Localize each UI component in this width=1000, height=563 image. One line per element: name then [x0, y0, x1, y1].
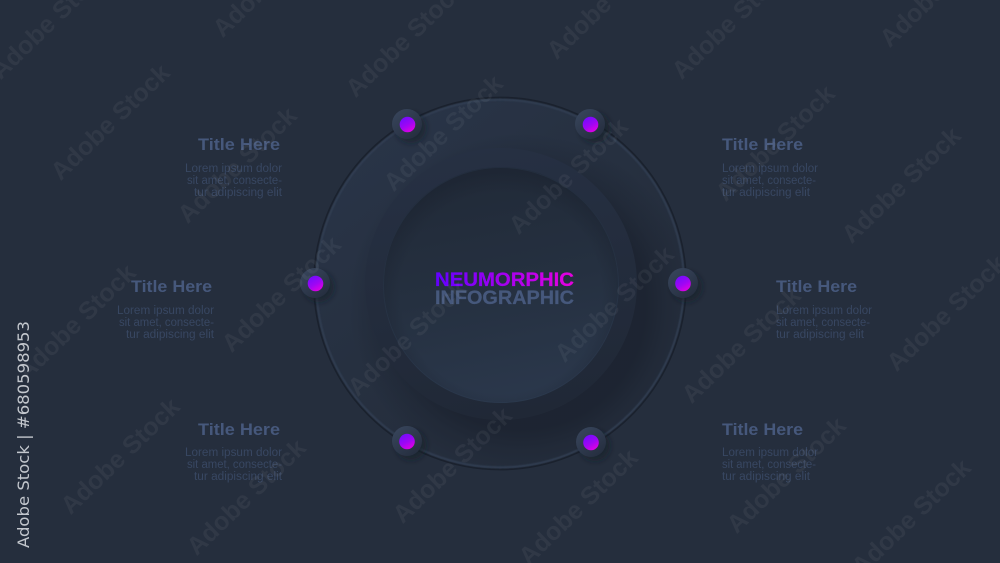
- circular diagram: [300, 98, 702, 470]
- text block: bottom left: Title Here: [198, 421, 280, 439]
- text block: top left: [185, 136, 283, 199]
- outer ring track: [314, 98, 686, 470]
- stock watermarks: Adobe Stock: [503, 113, 634, 240]
- knob: right: [668, 268, 702, 302]
- text block: bottom left: tur adipiscing elit: [194, 471, 283, 483]
- text block: top right: Title Here: [722, 136, 803, 154]
- stock watermarks: Adobe Stock: [710, 80, 841, 207]
- text block: bottom left: Lorem ipsum dolor: [185, 447, 282, 459]
- center title: INFOGRAPHIC: [435, 287, 574, 309]
- knob: bottom right: [576, 427, 610, 461]
- text block: middle right: [776, 278, 872, 341]
- stock id label: Adobe Stock | #680598953: [14, 321, 33, 548]
- text block: bottom right: Lorem ipsum dolor: [722, 447, 818, 459]
- stock watermarks: Adobe Stock: [387, 402, 518, 529]
- stock watermarks: Adobe Stock: [11, 259, 142, 386]
- stock watermarks: Adobe Stock: [836, 122, 967, 249]
- text block: bottom right: [722, 421, 818, 483]
- knob: bottom left: [392, 426, 426, 460]
- text block: top left: tur adipiscing elit: [194, 187, 283, 199]
- text block: top left: sit amet, consecte-: [187, 175, 282, 187]
- center title: [435, 269, 574, 309]
- text block: middle left: [117, 278, 215, 341]
- text block: middle left: tur adipiscing elit: [126, 329, 215, 341]
- knob: left: [300, 268, 334, 302]
- stock watermarks: Adobe Stock: [45, 59, 176, 186]
- knob: top left: [392, 109, 426, 143]
- stock watermarks: Adobe Stock: [549, 241, 680, 368]
- stock watermarks: Adobe Stock: [342, 275, 473, 402]
- stock watermarks: Adobe Stock: [676, 282, 807, 409]
- text block: bottom left: [185, 421, 283, 483]
- text block: bottom right: tur adipiscing elit: [722, 471, 811, 483]
- text block: middle right: Title Here: [776, 278, 857, 296]
- text block: middle left: Lorem ipsum dolor: [117, 305, 214, 317]
- text block: top right: Lorem ipsum dolor: [722, 163, 818, 175]
- text block: top left: Lorem ipsum dolor: [185, 163, 282, 175]
- stock watermarks: Adobe Stock: [378, 70, 509, 197]
- middle raised disk: [317, 100, 683, 466]
- stock watermarks: Adobe Stock: [172, 102, 303, 229]
- stock watermarks: Adobe Stock: [216, 231, 347, 358]
- knob: top right: [575, 109, 610, 143]
- text block: bottom left: sit amet, consecte-: [187, 459, 282, 471]
- stock watermarks: Adobe Stock: [721, 412, 852, 539]
- stock watermarks: Adobe Stock: [181, 434, 312, 561]
- center title: NEUMORPHIC: [435, 269, 574, 291]
- text block: bottom right: Title Here: [722, 421, 803, 439]
- text block: middle left: Title Here: [131, 278, 212, 296]
- inner recessed well: [383, 167, 619, 403]
- text block: middle right: tur adipiscing elit: [776, 329, 865, 341]
- text block: top right: sit amet, consecte-: [722, 175, 816, 187]
- text block: top right: [722, 136, 818, 199]
- stock watermarks: Adobe Stock: [55, 393, 186, 520]
- text block: top left: Title Here: [198, 136, 280, 154]
- text block: top right: tur adipiscing elit: [722, 187, 811, 199]
- text block: bottom right: sit amet, consecte-: [722, 459, 816, 471]
- text block: middle left: sit amet, consecte-: [119, 317, 214, 329]
- text block: middle right: sit amet, consecte-: [776, 317, 870, 329]
- text block: middle right: Lorem ipsum dolor: [776, 305, 872, 317]
